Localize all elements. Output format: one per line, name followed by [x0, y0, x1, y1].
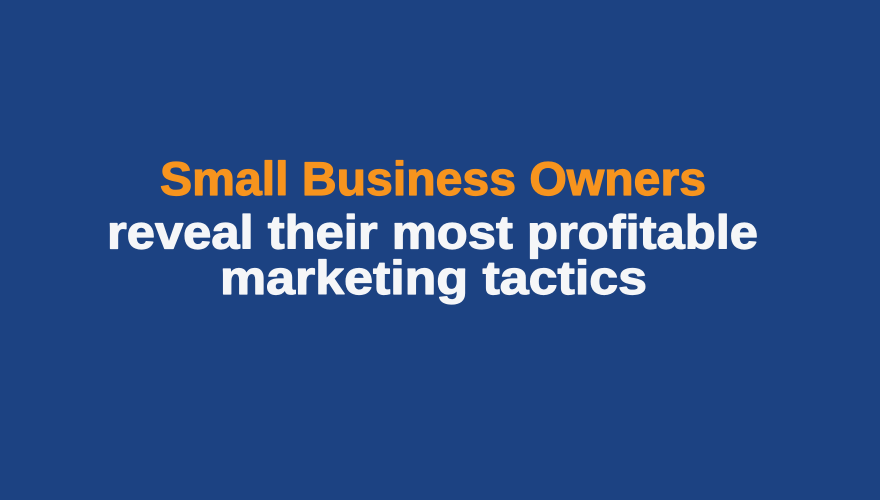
subheading line 2: marketing tactics — [220, 251, 647, 304]
title block — [107, 152, 758, 304]
heading: Small Business Owners: Small Business Owners — [160, 152, 706, 205]
subheading line 1: reveal their most profitable — [107, 206, 758, 258]
